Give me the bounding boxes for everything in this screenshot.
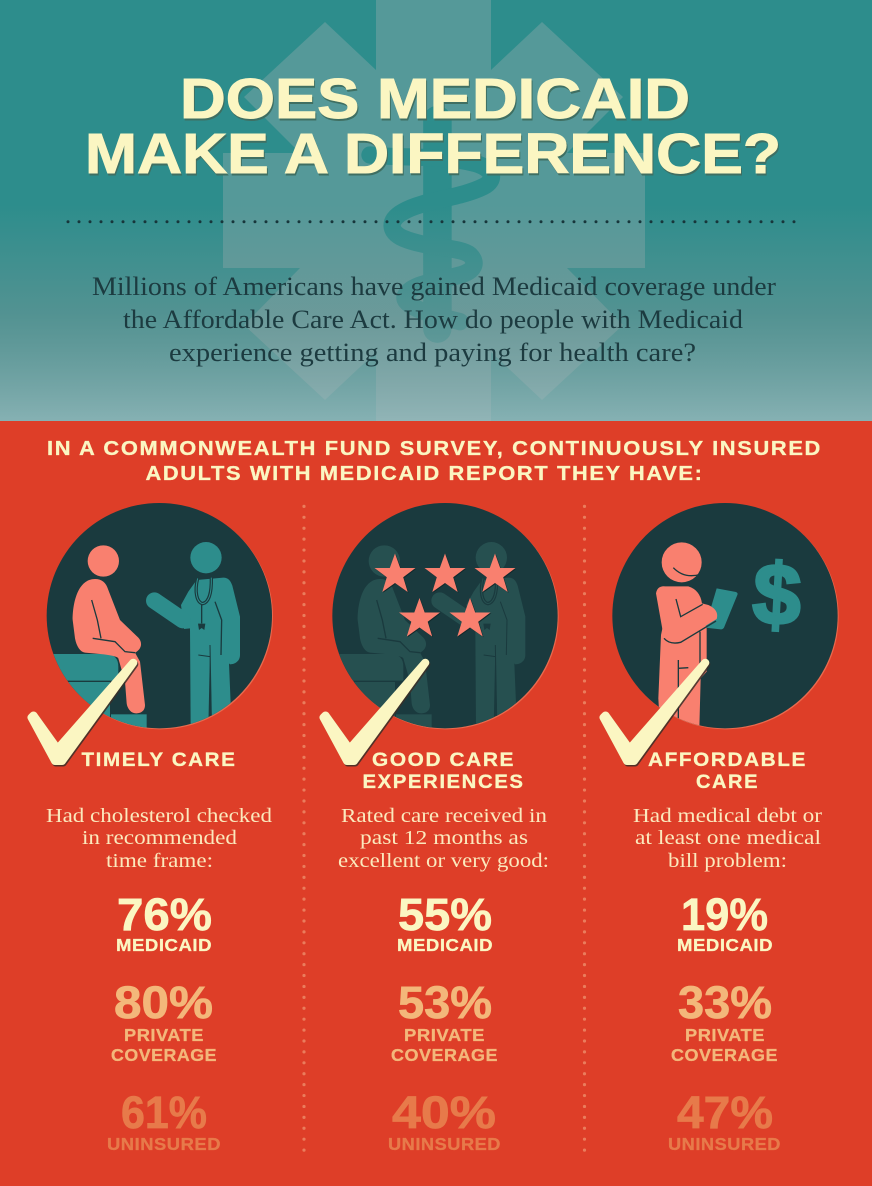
stat: private coverage 80%: 80% <box>114 977 213 1028</box>
stat: private coverage 80%: PRIVATE <box>124 1025 204 1045</box>
intro text: the Affordable Care Act. How do people with Medicaid <box>123 305 743 334</box>
description: in recommended <box>82 828 237 849</box>
description <box>338 806 549 872</box>
panel: red survey results <box>0 421 872 1186</box>
stat: private coverage 33%: PRIVATE <box>685 1025 765 1045</box>
heading: good care experiences <box>362 749 524 793</box>
icon: star of life background <box>223 0 645 421</box>
stat: private coverage 33%: COVERAGE <box>671 1045 778 1065</box>
stat: private coverage 33%: 33% <box>678 977 772 1028</box>
column: affordable care <box>604 503 839 1154</box>
description: bill problem: <box>668 851 787 872</box>
column: timely care <box>32 503 273 1154</box>
stat: private coverage 53%: COVERAGE <box>391 1045 498 1065</box>
column: good care experiences <box>324 503 559 1154</box>
icon: check mark <box>604 663 706 762</box>
heading: affordable care: CARE <box>696 771 759 793</box>
icon: check mark <box>32 663 134 762</box>
title: DOES MEDICAID <box>180 67 690 131</box>
survey heading: IN A COMMONWEALTH FUND SURVEY, CONTINUOUSLY INSURED <box>47 438 822 460</box>
stat: uninsured 61%: UNINSURED <box>107 1134 221 1154</box>
stat: medicaid 76%: MEDICAID <box>116 935 212 955</box>
description: Had cholesterol checked <box>46 806 272 827</box>
description <box>633 806 823 872</box>
intro text <box>92 272 776 367</box>
stat: uninsured 47%: 47% <box>677 1087 773 1138</box>
icon: five stars over patient and doctor <box>325 503 559 731</box>
stat: uninsured 61% <box>107 1087 221 1154</box>
icon: check mark <box>324 663 426 762</box>
panel: teal header <box>0 0 872 421</box>
stat: private coverage 80%: COVERAGE <box>111 1045 217 1065</box>
stat: private coverage 33% <box>671 977 778 1065</box>
title: DOES MEDICAID <box>181 69 691 133</box>
icon: serpent on staff <box>370 120 491 329</box>
description: time frame: <box>106 851 213 872</box>
heading: timely care: TIMELY CARE <box>82 749 236 771</box>
description: at least one medical <box>635 828 822 849</box>
heading: affordable care <box>648 749 807 793</box>
icon: patient and doctor <box>40 503 273 731</box>
stat: uninsured 40%: 40% <box>392 1087 496 1138</box>
title: MAKE A DIFFERENCE? <box>86 124 782 188</box>
description: Had medical debt or <box>633 806 823 827</box>
stat: private coverage 80% <box>111 977 217 1065</box>
icon: person with tablet and dollar sign <box>612 503 839 729</box>
stat: uninsured 40% <box>388 1087 501 1154</box>
intro text: Millions of Americans have gained Medicaid coverage under <box>92 272 776 301</box>
survey heading: ADULTS WITH MEDICAID REPORT THEY HAVE: <box>146 463 704 485</box>
title: MAKE A DIFFERENCE? <box>85 122 781 186</box>
heading: affordable care: AFFORDABLE <box>648 749 807 771</box>
stat: medicaid 76%: 76% <box>117 889 212 940</box>
stat: uninsured 40%: UNINSURED <box>388 1134 501 1154</box>
description: past 12 months as <box>360 828 528 849</box>
description: Rated care received in <box>341 806 547 827</box>
stat: medicaid 19%: MEDICAID <box>677 935 773 955</box>
stat: private coverage 53% <box>391 977 498 1065</box>
stat: medicaid 55%: 55% <box>398 889 492 940</box>
description: excellent or very good: <box>338 851 549 872</box>
stat: medicaid 55%: MEDICAID <box>397 935 493 955</box>
stat: medicaid 19%: 19% <box>681 889 768 940</box>
heading: good care experiences: GOOD CARE <box>372 749 515 771</box>
stat: uninsured 47%: UNINSURED <box>668 1134 781 1154</box>
stat: private coverage 53%: 53% <box>398 977 492 1028</box>
title <box>85 67 782 188</box>
description <box>46 806 272 872</box>
heading: good care experiences: EXPERIENCES <box>362 771 524 793</box>
stat: uninsured 47% <box>668 1087 781 1154</box>
intro text: experience getting and paying for health care? <box>169 338 696 367</box>
icon: person with tablet and dollar sign: $ <box>751 546 803 644</box>
stat: private coverage 53%: PRIVATE <box>404 1025 485 1045</box>
survey heading <box>47 438 822 485</box>
stat: uninsured 61%: 61% <box>121 1087 207 1138</box>
